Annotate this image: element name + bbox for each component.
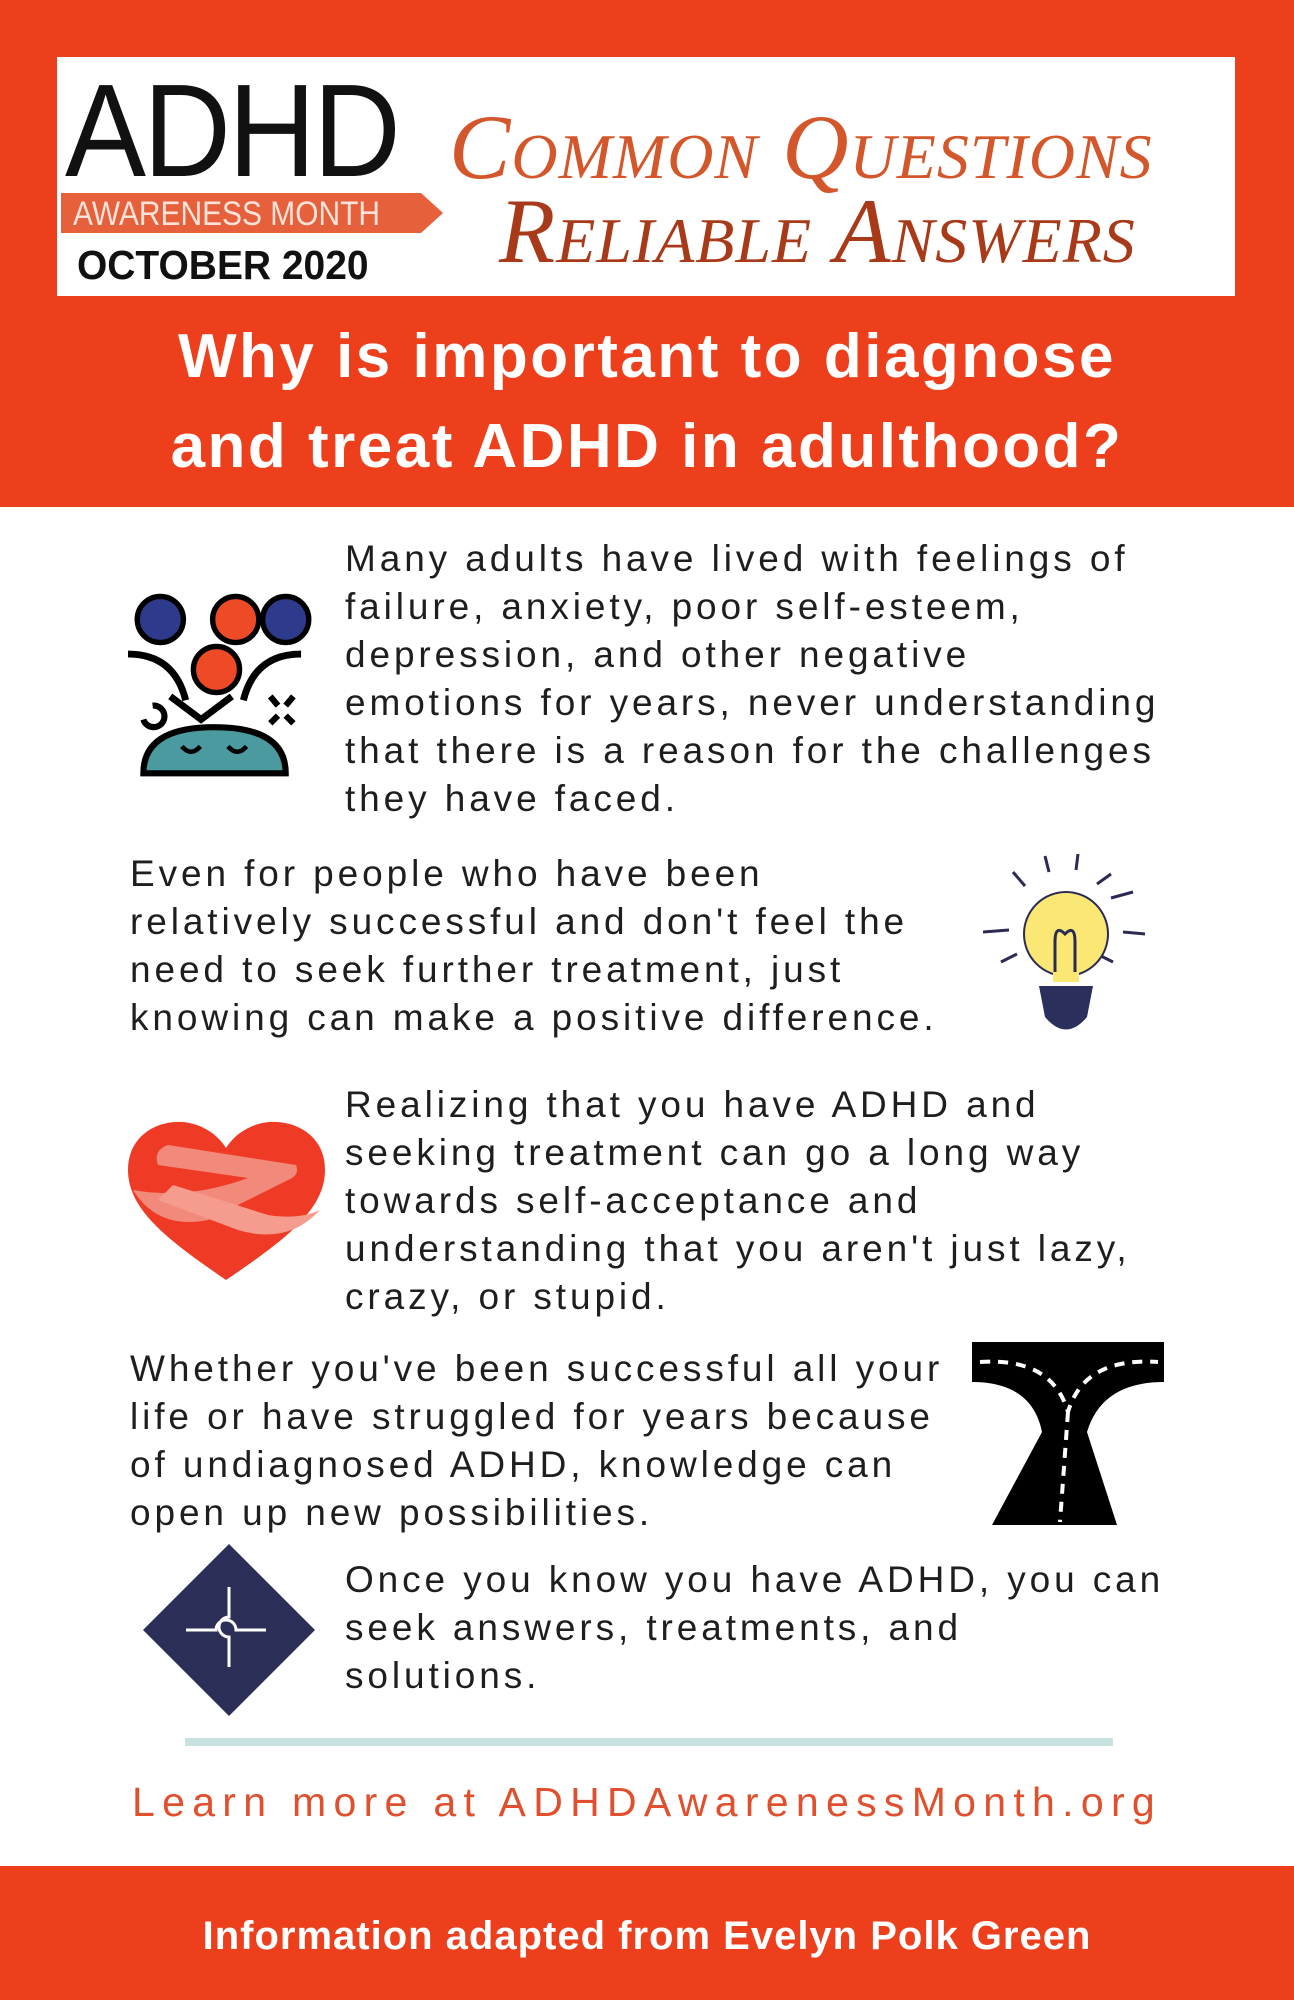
ADHD logo: ADHD	[65, 57, 398, 204]
footer band: Information adapted from Evelyn Polk Green	[203, 1914, 1091, 1958]
header logo box	[57, 57, 1235, 296]
question heading: Why is important to diagnose	[178, 322, 1116, 391]
top orange band	[0, 0, 1294, 507]
text block 4: open up new possibilities.	[130, 1492, 653, 1533]
ADHD logo: OCTOBER 2020	[77, 242, 369, 288]
text block 2: Even for people who have been	[130, 853, 764, 894]
ADHD logo: AWARENESS MONTH	[73, 195, 380, 233]
script title: Reliable Answers	[499, 180, 1136, 282]
icon: heart hug	[128, 1122, 325, 1280]
icon: road fork	[972, 1342, 1164, 1525]
question heading	[171, 322, 1123, 481]
script title	[449, 96, 1153, 282]
text block 3	[345, 1084, 1131, 1317]
text block 4	[130, 1348, 943, 1533]
footer band	[0, 1866, 1294, 2000]
text block 1: emotions for years, never understanding	[345, 682, 1159, 723]
text block 3: Realizing that you have ADHD and	[345, 1084, 1040, 1125]
text block 1: Many adults have lived with feelings of	[345, 538, 1129, 579]
text block 4: Whether you've been successful all your	[130, 1348, 943, 1389]
text block 2: need to seek further treatment, just	[130, 949, 844, 990]
text block 2: relatively successful and don't feel the	[130, 901, 908, 942]
question heading: and treat ADHD in adulthood?	[171, 412, 1123, 481]
text block 5	[345, 1559, 1164, 1696]
text block 1: failure, anxiety, poor self-esteem,	[345, 586, 1024, 627]
icon: emotions	[128, 594, 312, 776]
text block 5: Once you know you have ADHD, you can	[345, 1559, 1164, 1600]
text block 1: that there is a reason for the challenges	[345, 730, 1155, 771]
ADHD logo	[61, 57, 443, 288]
learn more link: Learn more at ADHDAwarenessMonth.org	[132, 1779, 1162, 1825]
text block 5: solutions.	[345, 1655, 540, 1696]
text block 1: depression, and other negative	[345, 634, 970, 675]
script title: Common Questions	[449, 96, 1153, 198]
text block 1: they have faced.	[345, 778, 679, 819]
icon: lightbulb	[983, 854, 1146, 1030]
text block 2	[130, 853, 938, 1038]
text block 4: life or have struggled for years because	[130, 1396, 934, 1437]
text block 3: seeking treatment can go a long way	[345, 1132, 1084, 1173]
icon: puzzle	[143, 1544, 315, 1716]
text block 5: seek answers, treatments, and	[345, 1607, 962, 1648]
text block 1	[345, 538, 1159, 819]
text block 3: crazy, or stupid.	[345, 1276, 670, 1317]
text block 2: knowing can make a positive difference.	[130, 997, 938, 1038]
text block 4: of undiagnosed ADHD, knowledge can	[130, 1444, 896, 1485]
text block 3: understanding that you aren't just lazy,	[345, 1228, 1131, 1269]
text block 3: towards self-acceptance and	[345, 1180, 921, 1221]
